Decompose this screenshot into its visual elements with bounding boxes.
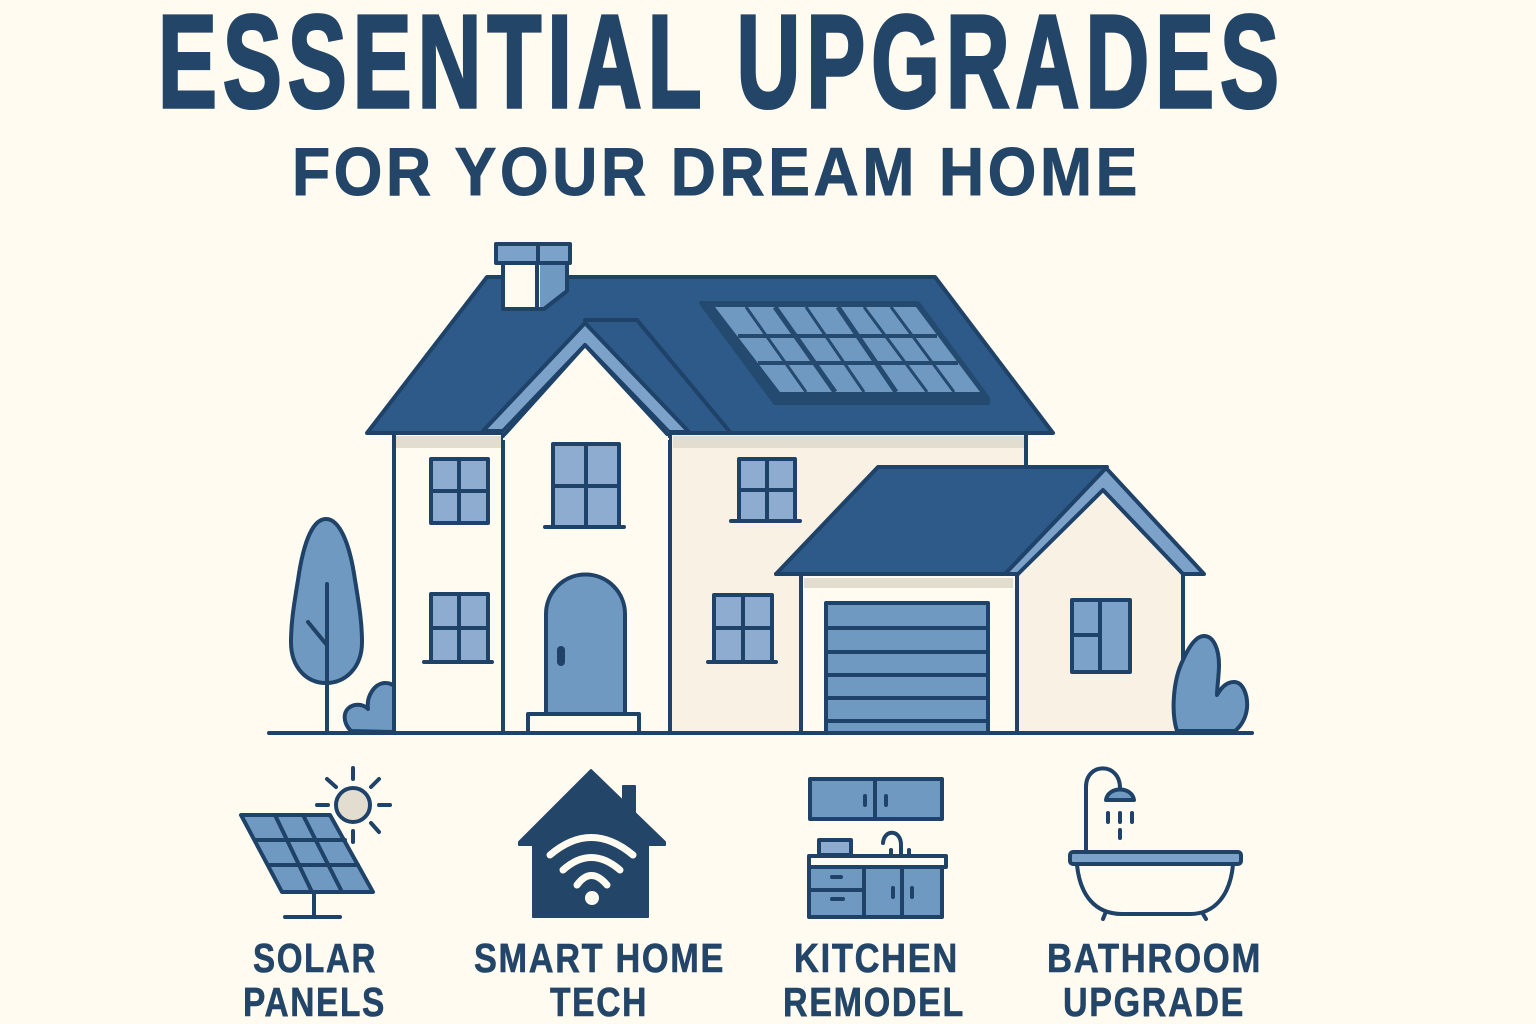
- icon: kitchen: [809, 779, 946, 917]
- tree: [291, 519, 362, 733]
- front gable trim: [483, 323, 689, 450]
- sun: [317, 768, 390, 842]
- label: solar panels: SOLAR: [253, 935, 377, 981]
- shower: [1086, 768, 1134, 851]
- label: bathroom upgrade: BATHROOM: [1047, 935, 1262, 981]
- tub: [1070, 852, 1241, 919]
- label: bathroom upgrade: UPGRADE: [1063, 979, 1245, 1024]
- label: kitchen remodel: [783, 935, 965, 1024]
- window lower left: [424, 594, 492, 662]
- counter: [809, 856, 946, 867]
- upper cabinets: [810, 779, 942, 819]
- main house walls: [393, 433, 1026, 733]
- label: kitchen remodel: REMODEL: [783, 979, 965, 1024]
- annex wall: [1017, 490, 1182, 733]
- label: bathroom upgrade: [1047, 935, 1262, 1024]
- rooftop solar array: [701, 303, 988, 403]
- icon: bathtub with shower: [1070, 768, 1241, 919]
- base cabinets: [809, 867, 942, 917]
- garage wall: [801, 575, 1017, 733]
- garage door: [826, 603, 988, 733]
- icon: solar panel with sun: [241, 768, 390, 917]
- label: smart home tech: [474, 935, 725, 1024]
- window lower right: [708, 595, 776, 662]
- window upper left: [431, 459, 488, 523]
- label: smart home tech: SMART HOME: [474, 935, 725, 981]
- right shrub: [1174, 636, 1247, 731]
- label: solar panels: [243, 935, 386, 1024]
- garage roof: [776, 467, 1107, 574]
- appliance and faucet: [819, 833, 909, 855]
- window upper right: [731, 459, 800, 521]
- left shrub: [345, 683, 394, 732]
- window upper center: [545, 444, 624, 527]
- roof ridge extension: [585, 320, 730, 432]
- illustration: house: [367, 244, 1204, 733]
- icon: smart home wifi: [519, 770, 665, 917]
- label: solar panels: PANELS: [243, 979, 386, 1024]
- label: smart home tech: TECH: [550, 979, 648, 1024]
- chimney: [496, 244, 570, 309]
- garage gable trim: [1005, 468, 1204, 574]
- front door: [528, 574, 639, 733]
- roof eave line: [776, 574, 1183, 733]
- main roof: [367, 277, 1053, 433]
- label: kitchen remodel: KITCHEN: [794, 935, 959, 981]
- panel: [241, 815, 373, 917]
- annex window: [1072, 600, 1130, 672]
- ground line: [269, 731, 1252, 735]
- subtitle: FOR YOUR DREAM HOME: [292, 134, 1141, 210]
